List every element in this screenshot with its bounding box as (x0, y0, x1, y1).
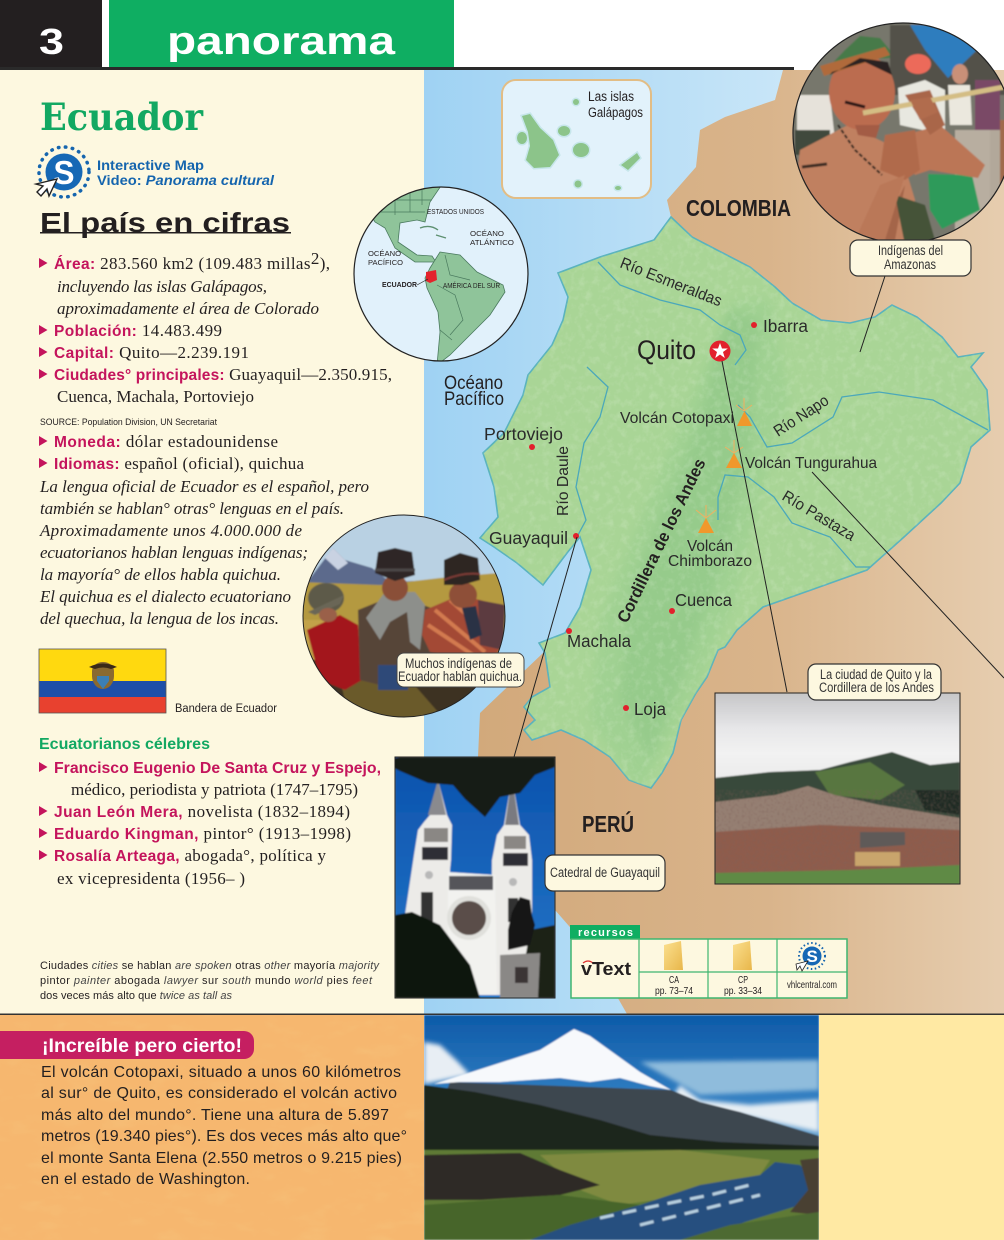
famous Ecuadorians list: ex vicepresidenta (1956– ) (57, 869, 245, 888)
resource labels (655, 974, 837, 997)
facts list: SOURCE: Population Division, UN Secretariat (40, 417, 217, 428)
right small tree (525, 924, 554, 998)
caption: Muchos indígenas de (405, 656, 512, 671)
torso (797, 125, 915, 245)
tree canopy top (380, 757, 555, 817)
flute (863, 87, 1004, 113)
nave (448, 872, 497, 995)
glossary (40, 960, 380, 1002)
famous Ecuadorians list: médico, periodista y patriota (1747–1795) (71, 780, 358, 799)
South America (425, 252, 505, 365)
language note: Aproximadamente unos 4.000.000 de (39, 521, 302, 540)
map labels: PERÚ (582, 810, 634, 837)
distant mountain (309, 558, 412, 586)
facts list: 2 (311, 249, 319, 268)
famous Ecuadorians list: Rosalía Arteaga, abogada°, política y (54, 846, 326, 865)
dark foreground ridge (424, 1085, 819, 1156)
body text: el monte Santa Elena (2.550 metros o 9.215 pies) (41, 1150, 402, 1167)
heading: El país en cifras: El país en cifras (40, 207, 290, 238)
caption: Indígenas del (878, 243, 943, 258)
folder icons (664, 941, 752, 970)
flag of Ecuador (39, 649, 277, 715)
title: Ecuador: Ecuador (40, 95, 203, 139)
heading: Ecuatorianos célebres: Ecuatorianos célebres (39, 736, 210, 753)
caption (545, 855, 665, 891)
golden grass (304, 572, 504, 652)
Caribbean islands (420, 226, 446, 238)
language note (39, 477, 369, 628)
glossary: dos veces más alto que twice as tall as (40, 990, 232, 1002)
dark mountain base (424, 1082, 819, 1150)
icon: volcanoes (696, 398, 752, 533)
inset label: Las islas (588, 89, 634, 104)
resource labels: vhlcentral.com (787, 979, 837, 991)
map labels: Loja (634, 699, 666, 719)
supersite icon (796, 943, 825, 971)
facts list (39, 249, 392, 473)
map labels: Río Pastaza (779, 488, 858, 545)
language note: ecuatorianos hablan lenguas indígenas; (40, 543, 308, 562)
locator globe: ECUADOR (382, 280, 418, 289)
caption (397, 653, 524, 687)
meadow (424, 1150, 819, 1240)
pedestal (500, 953, 540, 998)
map labels: Machala (567, 631, 631, 651)
famous Ecuadorians list: Eduardo Kingman, pintor° (1913–1998) (54, 824, 351, 843)
facts list: ), (320, 254, 330, 273)
language note: El quichua es el dialecto ecuatoriano (39, 587, 291, 606)
far right bank (790, 1158, 819, 1215)
facts list: Población: 14.483.499 (54, 321, 222, 340)
famous Ecuadorians list (39, 760, 381, 888)
coat of arms (92, 662, 114, 689)
map labels: Volcán Cotopaxi (620, 410, 734, 427)
resources box: recursos (578, 927, 633, 939)
equestrian statue (508, 897, 535, 950)
language note: del quechua, la lengua de los incas. (40, 609, 279, 628)
North and Central America (374, 188, 440, 262)
left tower (404, 784, 454, 936)
locator globe: ATLÁNTICO (470, 238, 514, 247)
interactive links: Video: Panorama cultural (97, 173, 274, 188)
locator globe: ESTADOS UNIDOS (427, 207, 484, 216)
map labels: Río Esmeraldas (618, 255, 724, 310)
resource labels: pp. 73–74 (655, 985, 693, 997)
map labels: Ibarra (763, 316, 808, 336)
rose window (447, 896, 491, 940)
facts list: Cuenca, Machala, Portoviejo (57, 387, 254, 406)
interactive links (97, 158, 274, 188)
facts list: incluyendo las islas Galápagos, (57, 277, 267, 296)
body text: metros (19.340 pies°). Es dos veces más alto que° (41, 1128, 407, 1145)
neighbouring countries Colombia and Peru (478, 70, 1004, 1014)
interactive links: Interactive Map (97, 158, 204, 173)
city markers (529, 322, 757, 711)
locator globe (354, 180, 528, 365)
photo: Catedral de Guayaquil (380, 757, 665, 998)
glossary: pintor painter abogada lawyer sur south mundo world pies feet (40, 975, 373, 987)
facts list: aproximadamente el área de Colorado (57, 299, 319, 318)
green skirt (928, 174, 980, 229)
map labels (444, 195, 877, 837)
caption (850, 240, 971, 276)
photo: Indígenas del Amazonas (790, 20, 1004, 276)
resource labels: CA (669, 974, 679, 986)
body text: El volcán Cotopaxi, situado a unos 60 kilómetros (41, 1064, 401, 1081)
snow cap (434, 1029, 671, 1090)
language note: La lengua oficial de Ecuador es el español, pero (39, 477, 369, 496)
center man (357, 602, 436, 684)
body text: más alto del mundo°. Tiene una altura de 5.897 (41, 1107, 389, 1124)
flag caption: Bandera de Ecuador (175, 703, 277, 715)
map labels: Guayaquil (489, 528, 568, 548)
bottom dark grass (314, 659, 474, 712)
map labels: Volcán (687, 538, 733, 555)
left text panel background (0, 70, 424, 1015)
dark lava field (424, 1153, 600, 1200)
right child (422, 598, 499, 652)
caption (808, 664, 941, 700)
glossary: Ciudades cities se hablan are spoken otras other mayoría majority (40, 960, 380, 972)
banner (0, 1031, 254, 1059)
clouds (424, 1042, 470, 1084)
map labels: Chimborazo (668, 553, 752, 570)
icon: supersite S (36, 147, 89, 197)
icon: capital star (710, 340, 730, 362)
resource labels: pp. 33–34 (724, 985, 762, 997)
language note: también se hablan° otras° lenguas en el país. (40, 499, 344, 518)
famous Ecuadorians list: Juan León Mera, novelista (1832–1894) (54, 802, 350, 821)
famous Ecuadorians list: Francisco Eugenio De Santa Cruz y Espejo, (54, 760, 381, 777)
photo: Quito and the Andes (715, 664, 960, 884)
body text (41, 1064, 407, 1188)
map labels: COLOMBIA (686, 195, 791, 221)
language note: la mayoría° de ellos habla quichua. (40, 565, 281, 584)
supersite icon: S (806, 947, 818, 966)
locator globe: OCÉANO (368, 249, 401, 258)
facts list: Moneda: dólar estadounidense (54, 432, 278, 451)
resources box (570, 925, 847, 998)
rivers (576, 262, 988, 567)
facts list: Ciudades° principales: Guayaquil—2.350.915, (54, 365, 392, 384)
caption: Cordillera de los Andes (819, 680, 934, 695)
foreground tree (395, 912, 480, 998)
caption: Amazonas (884, 257, 936, 272)
body text: al sur° de Quito, es considerado el volcán activo (41, 1085, 397, 1102)
crowd background (890, 25, 1004, 95)
necklace (838, 125, 882, 175)
header: chapter number: 3 (39, 21, 64, 62)
map labels: Pacífico (444, 389, 504, 410)
head (829, 54, 895, 130)
locator globe: AMÉRICA DEL SUR (443, 281, 500, 290)
Ecuador land (480, 217, 990, 788)
arms and hand (914, 126, 986, 178)
locator globe: PACÍFICO (368, 258, 403, 267)
map labels: Cuenca (675, 590, 732, 610)
map labels: Quito (637, 335, 696, 365)
map labels: Cordillera de los Andes (614, 456, 710, 626)
river (530, 1162, 815, 1240)
bottom panel: ¡Increíble pero cierto! (0, 1015, 424, 1240)
photo: Volcán Cotopaxi (424, 1015, 819, 1240)
header: panorama banner: panorama (167, 20, 395, 63)
body text: en el estado de Washington. (41, 1171, 250, 1188)
caption: Catedral de Guayaquil (550, 865, 660, 880)
left child (307, 615, 362, 690)
Ecuador locator (426, 270, 437, 283)
tower windows (421, 892, 433, 922)
map panel (424, 70, 1004, 1015)
photo: indigenous children (300, 514, 524, 720)
facts list: Idiomas: español (oficial), quichua (54, 454, 304, 473)
facts list: Área: 283.560 km2 (109.483 millas (54, 254, 310, 273)
map labels: Volcán Tungurahua (745, 455, 877, 472)
header: panorama banner (109, 0, 454, 67)
icon: supersite S: S (54, 154, 74, 191)
bottom right yellow panel (819, 1015, 1004, 1240)
caption: Ecuador hablan quichua. (398, 669, 522, 684)
inset label: Galápagos (588, 105, 643, 120)
map labels: Río Napo (771, 392, 832, 440)
map labels: Portoviejo (484, 424, 563, 444)
right tower (490, 777, 532, 995)
facts list: Capital: Quito—2.239.191 (54, 343, 249, 362)
Galápagos inset (502, 80, 651, 198)
map labels: Río Daule (555, 446, 572, 516)
map labels: Océano (444, 373, 503, 394)
resource labels: CP (738, 974, 748, 986)
header: chapter number (0, 0, 102, 68)
lower bank (424, 1195, 640, 1240)
vText logo: vText (581, 959, 631, 979)
caption: La ciudad de Quito y la (820, 667, 932, 682)
leader lines (514, 276, 1004, 757)
locator globe: OCÉANO (470, 229, 504, 238)
bottom panel: ¡Increíble pero cierto!: ¡Increíble pero cierto! (42, 1036, 242, 1057)
